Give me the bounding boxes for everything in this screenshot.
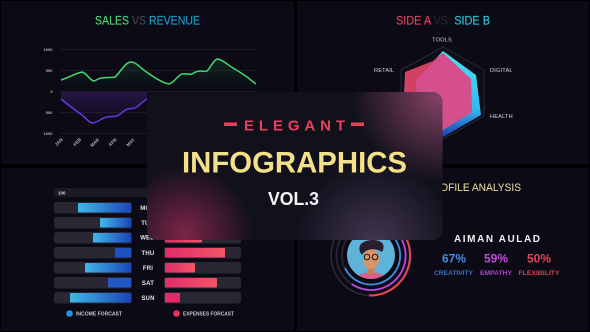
line chart: MAR <box>89 137 101 148</box>
line chart: APR <box>107 137 118 147</box>
stat: empathy: 59% <box>484 252 508 266</box>
stat: empathy: EMPATHY <box>480 271 512 277</box>
stat: flexibility: 50% <box>527 252 551 266</box>
radar chart <box>401 47 484 139</box>
line chart: MAY <box>125 137 136 147</box>
line chart: 500 <box>46 110 53 115</box>
legend: INCOME FORCAST <box>76 312 122 318</box>
line chart: FEB <box>72 137 83 147</box>
legend <box>66 310 234 318</box>
avatar <box>347 240 395 279</box>
line chart: JAN <box>54 137 64 147</box>
day labels: SAT <box>142 281 154 287</box>
panel: profile analysis <box>297 168 589 331</box>
panel: income vs expenses bars: 100 <box>58 190 66 196</box>
expense bars <box>164 232 241 304</box>
stat: flexibility: FLEXIBILITY <box>518 271 560 277</box>
day labels <box>140 206 155 302</box>
subtitle: vol.3: VOL.3 <box>268 189 319 209</box>
line chart: 1000 <box>44 47 53 52</box>
day labels: SUN <box>141 296 155 302</box>
stat: creativity: CREATIVITY <box>434 271 473 277</box>
day labels: WED <box>140 236 155 242</box>
radar labels: RETAIL <box>374 68 394 74</box>
day labels: TUE <box>141 221 154 227</box>
heading: side a vs side b: SIDE A VS: SIDE B <box>396 16 490 28</box>
title card <box>147 92 442 240</box>
stat: creativity <box>434 252 473 277</box>
title: infographics: INFOGRAPHICS <box>182 146 407 180</box>
stat: empathy <box>480 252 512 277</box>
name: AIMAN AULAD <box>454 234 540 245</box>
radar labels: DIGITAL <box>490 68 513 74</box>
radar labels: TOOLS <box>432 38 452 44</box>
radar labels: HEALTH <box>490 114 513 120</box>
panel: side a vs side b <box>297 1 589 164</box>
heading: profile analysis: PROFILE ANALYSIS <box>426 182 521 194</box>
day labels: FRI <box>143 266 153 272</box>
panel: income vs expenses bars <box>1 168 294 331</box>
income bars <box>54 202 132 304</box>
legend: EXPENSES FORCAST <box>183 312 234 318</box>
header row <box>54 188 241 197</box>
progress rings <box>331 216 411 296</box>
eyebrow: elegant: ELEGANT <box>244 118 345 134</box>
line chart: 0 <box>50 89 53 94</box>
line chart <box>44 47 256 148</box>
line chart: 1000 <box>44 131 53 136</box>
day labels: MON <box>140 206 155 212</box>
day labels: THU <box>142 251 154 257</box>
stat: creativity: 67% <box>442 252 466 266</box>
heading: sales vs revenue: SALES VS REVENUE <box>95 16 200 28</box>
line chart: 500 <box>46 68 53 73</box>
panel: sales vs revenue <box>1 1 294 164</box>
radar labels <box>374 38 513 120</box>
stat: flexibility <box>518 252 560 277</box>
